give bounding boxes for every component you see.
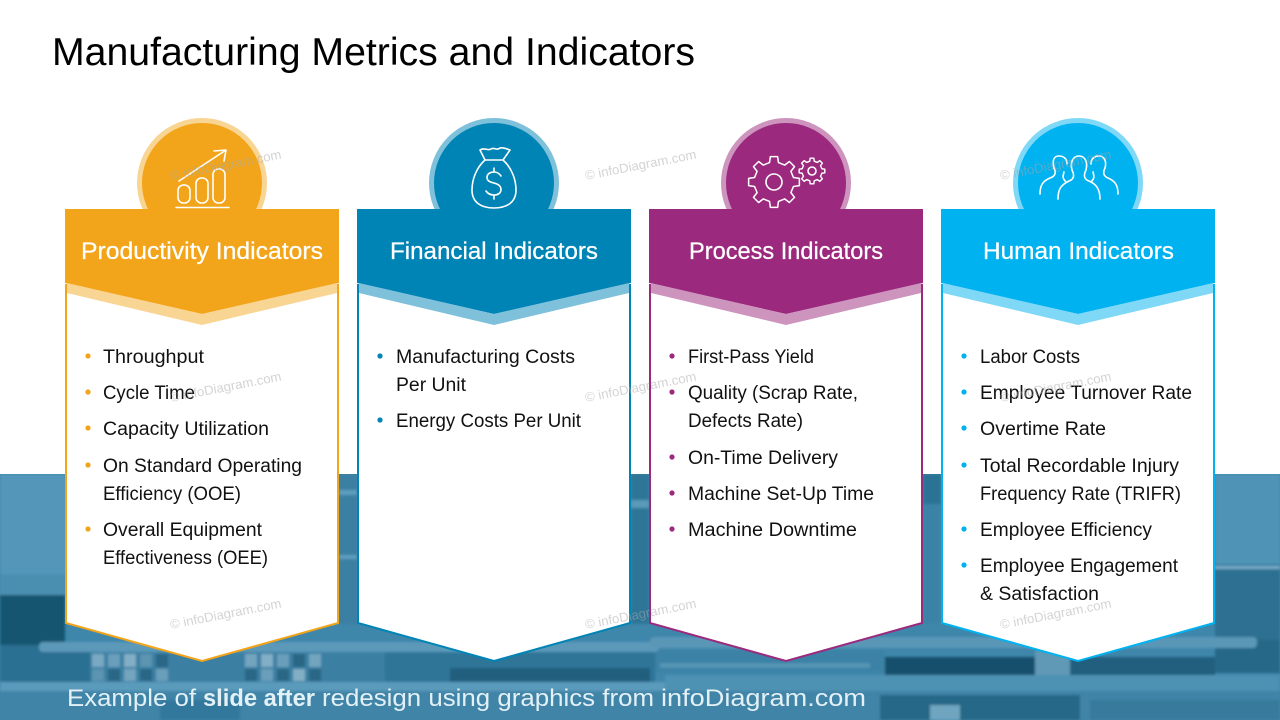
bullet list: Manufacturing Costs [396, 347, 575, 368]
card body [358, 285, 630, 661]
watermarks: © infoDiagram.com [169, 147, 282, 183]
footer caption [67, 685, 866, 712]
bullet list: Total Recordable Injury [980, 456, 1180, 477]
heading: Productivity Indicators [81, 238, 323, 265]
bullet list: Overtime Rate [980, 419, 1106, 440]
heading: Financial Indicators [390, 238, 598, 265]
footer caption: slide after [203, 685, 315, 712]
bullet list: Capacity Utilization [103, 419, 269, 440]
header ribbon [943, 283, 1213, 325]
bullet list: Throughput [103, 347, 205, 368]
panel: process indicators [649, 120, 923, 661]
bullet list: Employee Engagement [980, 556, 1179, 577]
bullet list: Cycle Time [103, 383, 195, 404]
card body [942, 285, 1214, 661]
watermarks [169, 147, 1112, 632]
header banner [649, 209, 923, 314]
bullet list: Machine Downtime [688, 520, 857, 541]
bullet list: On Standard Operating [103, 456, 302, 477]
watermarks: © infoDiagram.com [584, 596, 697, 632]
bullet list: Frequency Rate (TRIFR) [980, 484, 1181, 505]
icon badge: people [1016, 120, 1140, 246]
bullet list [377, 347, 582, 432]
card body [650, 285, 922, 661]
icon badge: productivity chart [140, 120, 264, 246]
header ribbon [67, 283, 337, 325]
background photo band [0, 474, 1280, 720]
bullet list: Employee Efficiency [980, 520, 1153, 541]
watermarks: © infoDiagram.com [169, 369, 282, 405]
icon badge: gears [724, 120, 848, 246]
icon badge: money bag [432, 120, 556, 246]
header ribbon [359, 283, 629, 325]
header banner [65, 209, 339, 314]
heading: Process Indicators [689, 238, 883, 265]
watermarks: © infoDiagram.com [169, 596, 282, 632]
watermarks: © infoDiagram.com [584, 369, 697, 405]
footer caption: redesign using graphics from [322, 685, 654, 712]
header banner [941, 209, 1215, 314]
bullet list: First-Pass Yield [688, 347, 814, 368]
bullet list: Effectiveness (OEE) [103, 548, 268, 569]
bullet list: Labor Costs [980, 347, 1080, 368]
card body [66, 285, 338, 661]
bullet list: Employee Turnover Rate [980, 383, 1192, 404]
header banner [357, 209, 631, 314]
bullet list: Quality (Scrap Rate, [688, 383, 858, 404]
bullet list: Defects Rate) [688, 411, 803, 432]
bullet list: Overall Equipment [103, 520, 263, 541]
panel: human indicators [941, 120, 1215, 661]
bullet list [85, 347, 302, 569]
heading: Human Indicators [983, 238, 1174, 265]
bullet list [669, 347, 874, 541]
bullet list: On-Time Delivery [688, 448, 839, 469]
watermarks: © infoDiagram.com [999, 147, 1112, 183]
bullet list: & Satisfaction [980, 584, 1099, 605]
watermarks: © infoDiagram.com [584, 147, 697, 183]
footer caption: Example of [67, 685, 196, 712]
bullet list [961, 347, 1192, 605]
footer caption: infoDiagram.com [661, 685, 866, 712]
bullet list: Efficiency (OOE) [103, 484, 241, 505]
watermarks: © infoDiagram.com [999, 369, 1112, 405]
bullet list: Per Unit [396, 375, 467, 396]
title: Manufacturing Metrics and Indicators [52, 31, 695, 74]
watermarks: © infoDiagram.com [999, 596, 1112, 632]
panel: productivity indicators [65, 120, 339, 661]
bullet list: Energy Costs Per Unit [396, 411, 582, 432]
header ribbon [651, 283, 921, 325]
bullet list: Machine Set-Up Time [688, 484, 874, 505]
panel: financial indicators [357, 120, 631, 661]
